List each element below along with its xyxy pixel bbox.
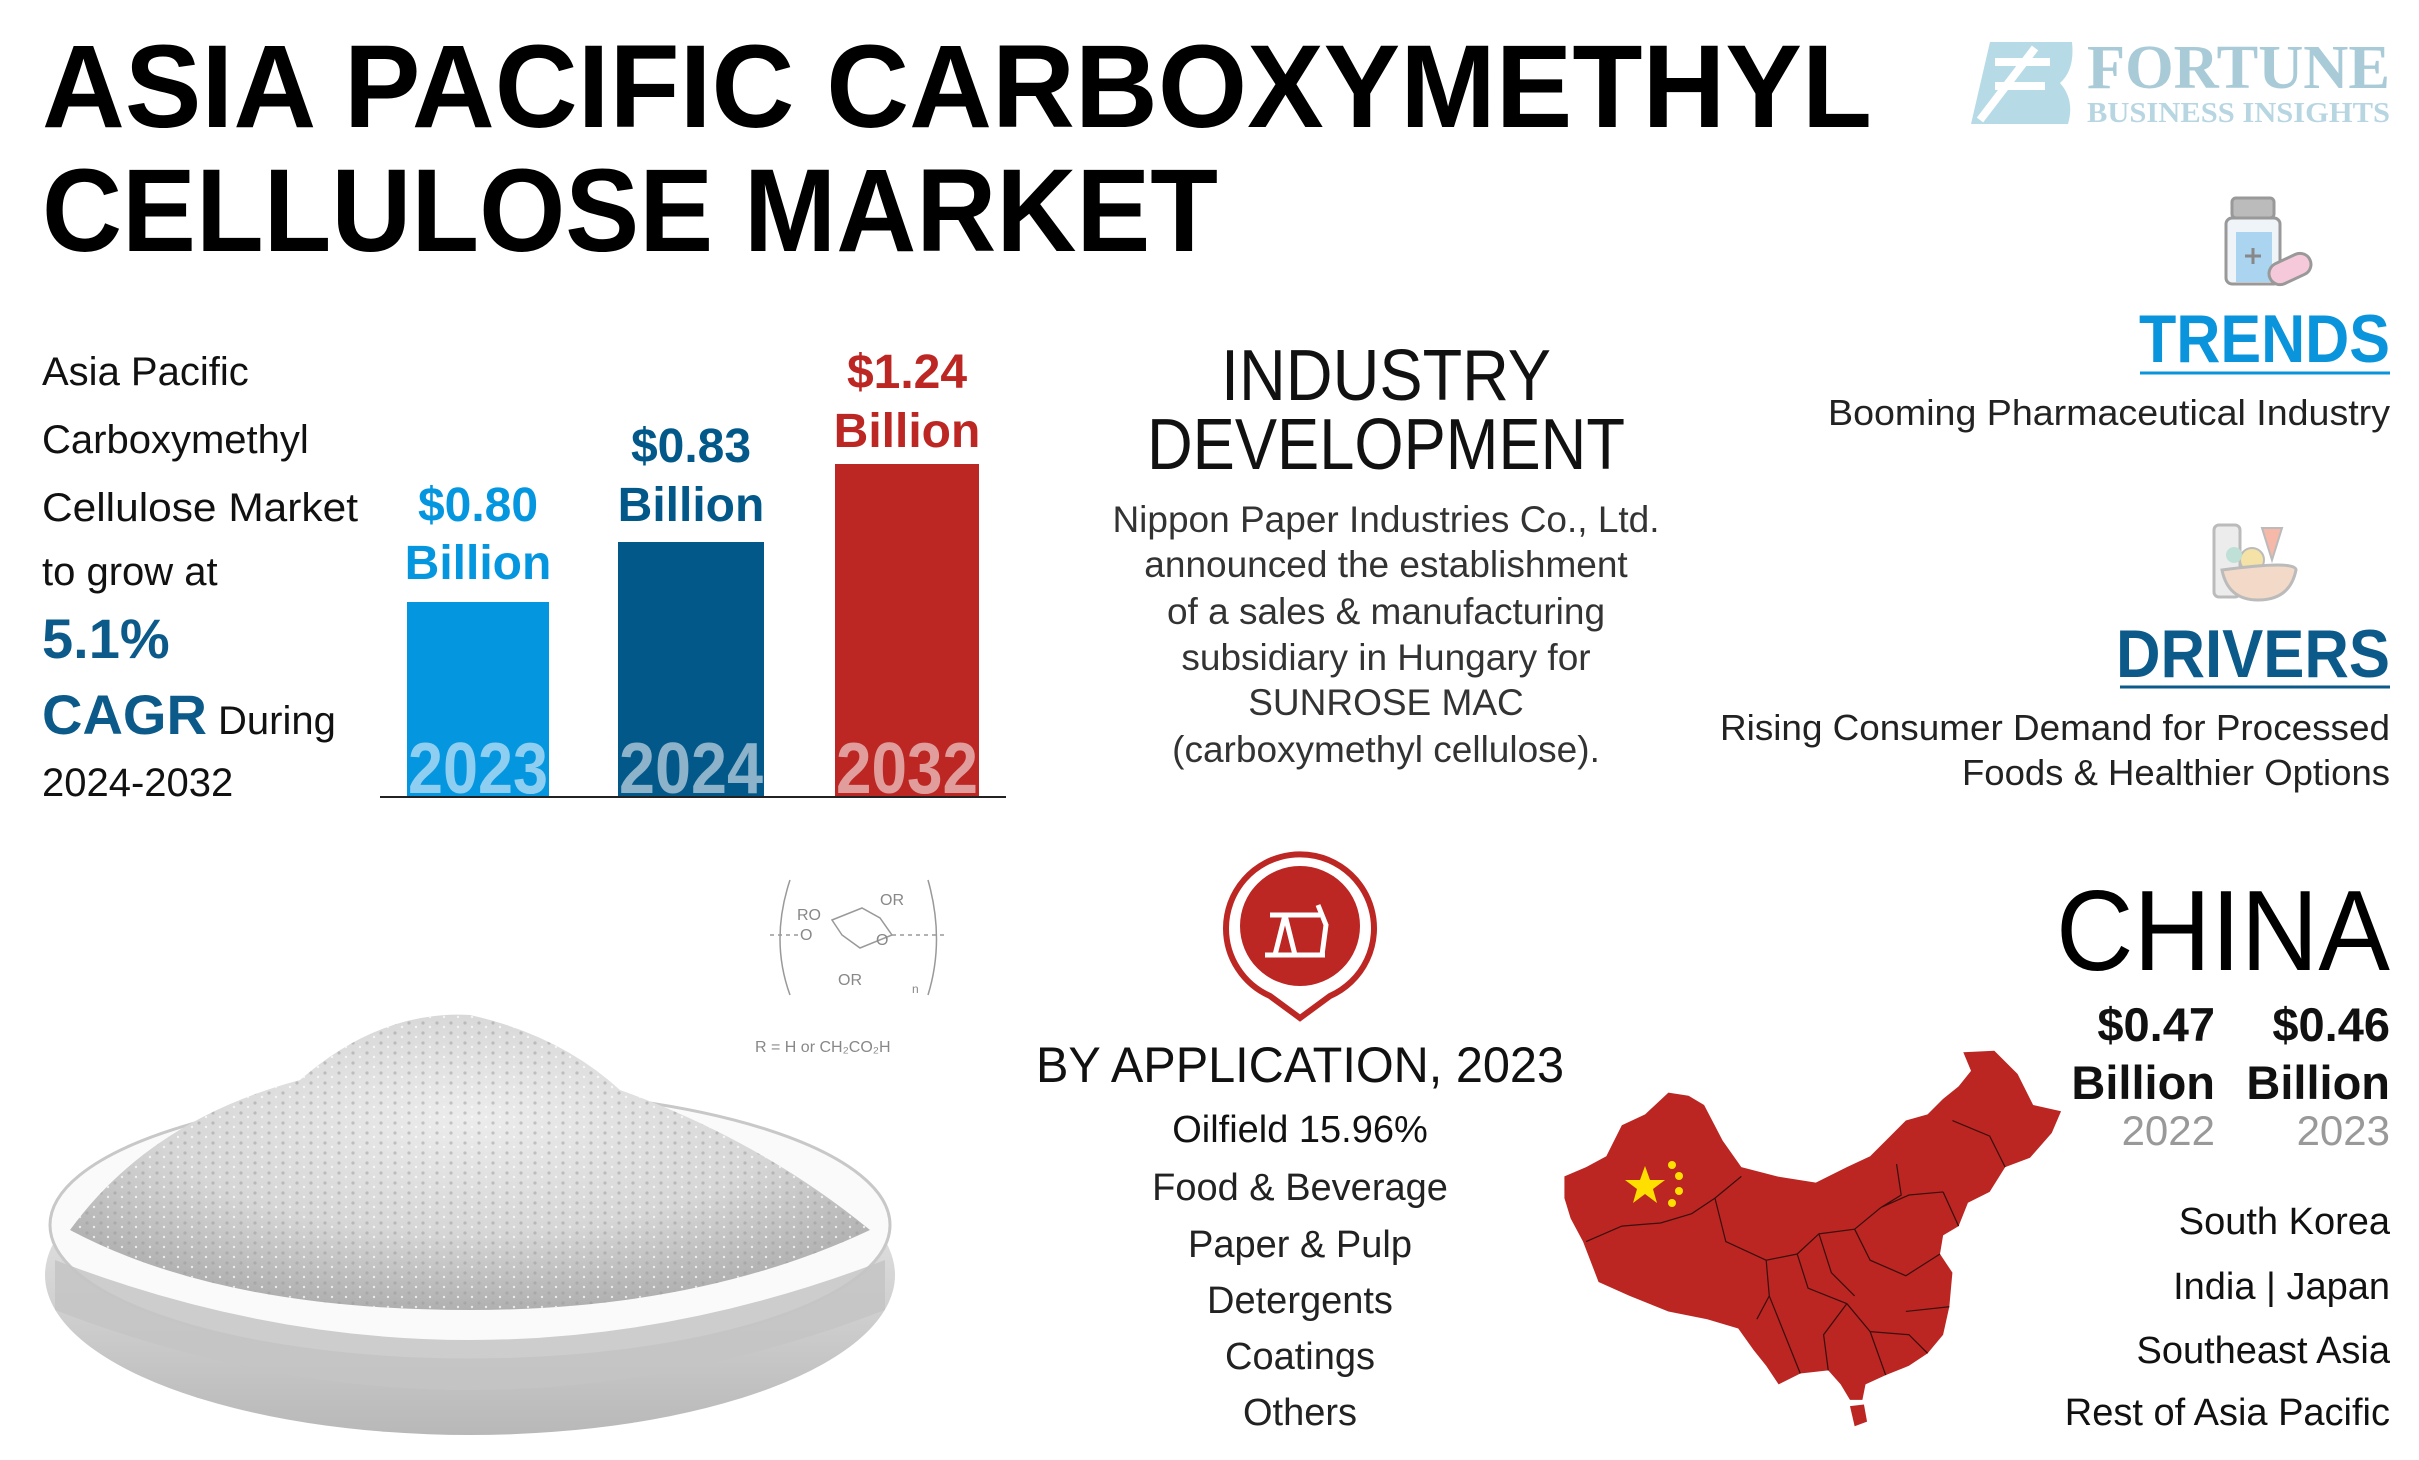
- industry development heading: INDUSTRY: [1221, 336, 1551, 416]
- bar 2024: Billion: [618, 479, 764, 532]
- chemical structure: O: [876, 932, 888, 949]
- industry development heading: [1147, 336, 1625, 485]
- bar 2023: $0.80: [418, 479, 538, 532]
- text block: CAGR summary: CAGR During: [42, 683, 336, 746]
- bar 2023: Billion: [405, 537, 551, 590]
- bar 2024: [618, 420, 764, 809]
- chemical structure: OR: [838, 972, 862, 989]
- text block: CAGR summary: [42, 350, 358, 805]
- text block: CAGR summary: 2024-2032: [42, 761, 233, 805]
- map: China: [1564, 1051, 2061, 1426]
- trends text: Booming Pharmaceutical Industry: [1828, 392, 2390, 433]
- bar 2024: 2024: [619, 729, 763, 809]
- country list: [2065, 1201, 2391, 1434]
- bar chart: [380, 346, 1006, 809]
- logo: FORTUNE: [2087, 34, 2390, 102]
- country list: India | Japan: [2173, 1266, 2390, 1308]
- china values: $0.46: [2272, 998, 2390, 1051]
- application list: Food & Beverage: [1152, 1167, 1448, 1209]
- text block: CAGR summary: 5.1%: [42, 607, 170, 670]
- application list: Others: [1243, 1392, 1357, 1434]
- bar 2032: $1.24: [847, 346, 967, 399]
- title: CELLULOSE MARKET: [42, 145, 1218, 277]
- china heading: CHINA: [2056, 868, 2390, 995]
- image: powder in dish: [45, 1015, 895, 1435]
- china values: Billion: [2071, 1056, 2215, 1109]
- application list: Oilfield 15.96%: [1172, 1109, 1428, 1151]
- drivers text: Foods & Healthier Options: [1962, 752, 2390, 793]
- china values: $0.47: [2097, 998, 2215, 1051]
- bar 2023: [405, 479, 551, 809]
- chemical structure: n: [912, 982, 919, 996]
- icon: medicine bottle: [2226, 198, 2315, 288]
- chemical structure: RO: [797, 907, 821, 924]
- china values: 2023: [2297, 1107, 2390, 1154]
- china values: [2071, 998, 2390, 1154]
- industry development text: subsidiary in Hungary for: [1181, 637, 1591, 678]
- icon: flag stars: [1625, 1161, 1683, 1207]
- industry development text: Nippon Paper Industries Co., Ltd.: [1112, 499, 1660, 540]
- title: ASIA PACIFIC CARBOXYMETHYL: [42, 21, 1872, 153]
- chemical structure: OR: [880, 892, 904, 909]
- china values: Billion: [2246, 1056, 2390, 1109]
- logo: [1971, 34, 2390, 129]
- drivers heading: DRIVERS: [2116, 616, 2390, 692]
- text block: CAGR summary: to grow at: [42, 550, 218, 594]
- icon: oil pump pin: [1226, 854, 1374, 1018]
- industry development text: (carboxymethyl cellulose).: [1172, 729, 1600, 770]
- application list: Coatings: [1225, 1336, 1375, 1378]
- bar 2032: [834, 346, 980, 809]
- industry development heading: DEVELOPMENT: [1147, 405, 1625, 485]
- country list: South Korea: [2179, 1201, 2391, 1243]
- application list: Paper & Pulp: [1188, 1224, 1412, 1266]
- drivers text: [1720, 707, 2390, 793]
- by application heading: BY APPLICATION, 2023: [1036, 1037, 1564, 1093]
- application list: [1152, 1109, 1448, 1434]
- bar 2032: Billion: [834, 405, 980, 458]
- bar 2032: 2032: [836, 729, 978, 809]
- chemical structure: R = H or CH₂CO₂H: [755, 1039, 891, 1056]
- text block: CAGR summary: Asia Pacific: [42, 350, 249, 394]
- drivers text: Rising Consumer Demand for Processed: [1720, 707, 2390, 748]
- trends heading: TRENDS: [2139, 301, 2390, 377]
- country list: Rest of Asia Pacific: [2065, 1392, 2390, 1434]
- chemical structure: [755, 880, 945, 1056]
- bar 2024: $0.83: [631, 420, 751, 473]
- chemical structure: O: [800, 927, 812, 944]
- text block: CAGR summary: Cellulose Market: [42, 486, 358, 530]
- industry development text: SUNROSE MAC: [1248, 682, 1524, 723]
- application list: Detergents: [1207, 1280, 1393, 1322]
- country list: Southeast Asia: [2136, 1330, 2391, 1372]
- logo: BUSINESS INSIGHTS: [2087, 98, 2390, 129]
- icon: food bowl: [2214, 525, 2296, 600]
- industry development text: announced the establishment: [1144, 544, 1628, 585]
- china values: 2022: [2122, 1107, 2215, 1154]
- text block: CAGR summary: Carboxymethyl: [42, 418, 309, 462]
- industry development text: [1112, 499, 1660, 770]
- title: [42, 21, 1872, 277]
- industry development text: of a sales & manufacturing: [1167, 591, 1605, 632]
- bar 2023: 2023: [408, 729, 548, 809]
